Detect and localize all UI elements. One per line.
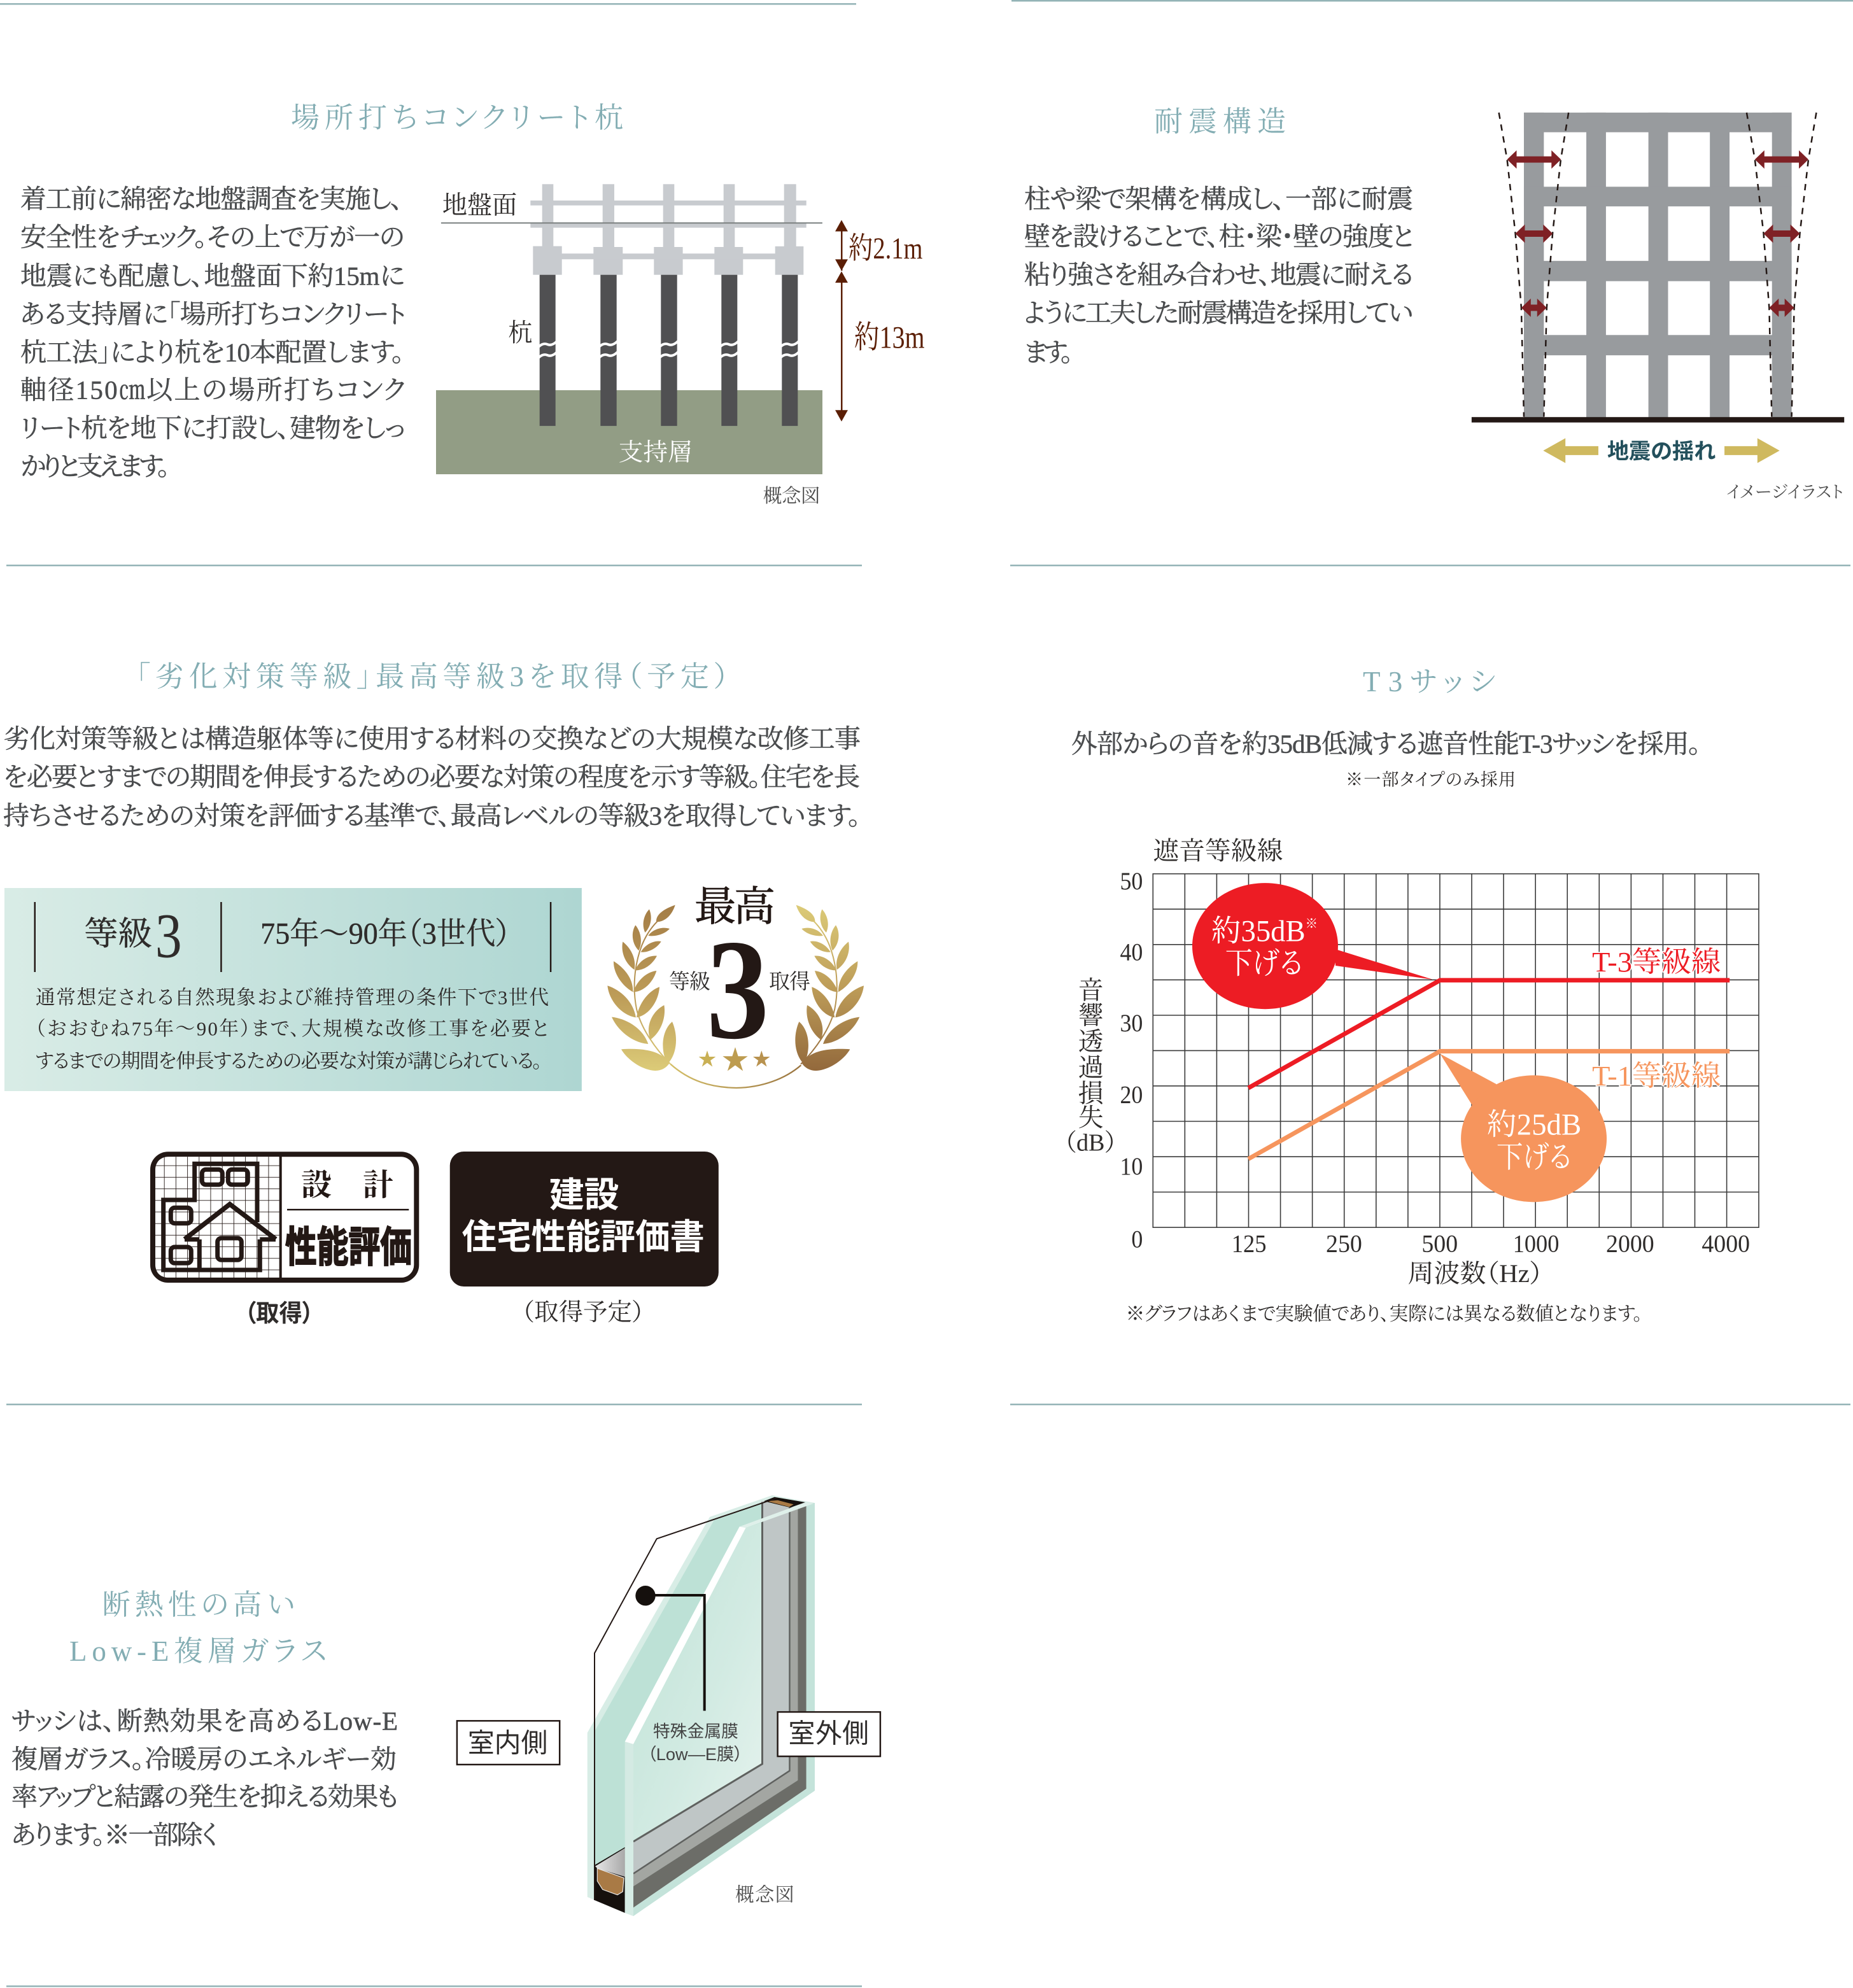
text block: grade description: 劣化対策等級とは構造躯体等に使用する材料の交換などの大規模な改修工事: [4, 724, 861, 754]
box separators: [35, 902, 551, 972]
dimension arrows and labels: [442, 192, 924, 507]
badge text: 等級: [669, 970, 710, 994]
heading: T3: T3サッシ: [1363, 666, 1495, 698]
heading: seismic: 耐震構造: [1154, 106, 1286, 137]
text block: piles description: ある支持層に「場所打ちコンクリート: [20, 299, 406, 328]
T-3 label: T-3等級線: [1592, 946, 1721, 978]
note: partial adoption: ※一部タイプのみ採用: [1346, 770, 1516, 789]
laurel arc: [670, 1064, 801, 1088]
panel: T3 sash: [1064, 666, 1759, 1325]
y axis numbers: 50: [1120, 868, 1143, 895]
text block: seismic description: ます。: [1024, 337, 1074, 367]
diagram: glass cross-section: [457, 1495, 880, 1916]
text block: Low-E description: 複層ガラス。冷暖房のエネルギー効: [11, 1744, 397, 1773]
frame edge lines: [633, 1502, 789, 1873]
text block: piles description: 安全性をチェック。その上で万が一の: [20, 223, 405, 252]
badge text: [669, 884, 810, 1069]
text block: seismic description: 壁を設けることで、柱・梁・壁の強度と: [1024, 222, 1414, 251]
diagram labels: 約2.1m: [849, 232, 922, 265]
stars: [699, 1047, 770, 1071]
text block: seismic description: 粘り強さを組み合わせ、地震に耐える: [1024, 260, 1413, 289]
pile break marks: [539, 341, 799, 358]
text block: Low-E description: [11, 1706, 398, 1850]
bearing layer: [436, 390, 822, 474]
logo grid: [155, 1157, 280, 1278]
logo: construction performance evaluation: [450, 1152, 719, 1287]
grade note: [36, 986, 549, 1073]
y axis numbers: 20: [1120, 1082, 1143, 1109]
callout: about 35dB: 下げる: [1225, 947, 1302, 981]
text block: Low-E description: 率アップと結露の発生を抑える効果も: [11, 1782, 398, 1812]
y axis numbers: [1120, 868, 1143, 1253]
x axis numbers: 1000: [1513, 1230, 1559, 1258]
left laurel: [607, 905, 676, 1071]
film label: 特殊金属膜: [653, 1722, 738, 1741]
ground level line: [441, 222, 822, 223]
caption: concept: 概念図: [735, 1885, 794, 1906]
grade label: 3: [155, 900, 182, 971]
panel: Low-E double glazing: [11, 1495, 880, 1916]
text block: Low-E description: サッシは、断熱効果を高めるLow-E: [11, 1706, 398, 1735]
chart: sound insulation grade lines: [1064, 837, 1759, 1325]
y axis numbers: 0: [1131, 1226, 1143, 1253]
text block: Low-E description: あります。※一部除く: [11, 1821, 220, 1850]
panel: seismic structure: [1024, 106, 1844, 502]
text block: grade description: 持ちさせるための対策を評価する基準で、最高レベルの等級3を取得しています。: [3, 801, 861, 830]
heading: Low-E: 断熱性の高い: [102, 1589, 295, 1621]
grade note: （おおむね75年〜90年）まで、大規模な改修工事を必要と: [36, 1017, 549, 1040]
logo divider: [279, 1155, 282, 1280]
glass outer body: [588, 1495, 815, 1916]
ground bar: [1472, 417, 1844, 423]
middle frame: [633, 1506, 798, 1886]
caption: acquired: （取得）: [244, 1301, 314, 1327]
callout: about 25dB: 下げる: [1497, 1141, 1571, 1174]
T-3 line: [1248, 980, 1730, 1088]
caption: image illustration: イメージイラスト: [1726, 483, 1843, 502]
y axis numbers: 10: [1120, 1153, 1143, 1180]
diagram: pile cross-section: [436, 184, 924, 507]
indoor pane: [595, 1504, 761, 1865]
badge text: 最高: [694, 884, 775, 930]
text block: piles description: 軸径150㎝以上の場所打ちコンク: [20, 376, 405, 405]
pale glass edge strip: [625, 1742, 633, 1916]
logo text: 性能評価: [285, 1223, 412, 1271]
outdoor pane: [633, 1523, 761, 1842]
x axis title: 周波数（Hz）: [1407, 1260, 1543, 1288]
text block: grade description: を必要とすまでの期間を伸長するための必要な対策の程度を示す等級。住宅を長: [3, 763, 860, 792]
y axis title: 音響透過損失: [1078, 976, 1104, 1132]
spacer: [633, 1501, 791, 1873]
top corner: [764, 1497, 805, 1507]
logo: construction performance evaluation: 建設: [549, 1175, 619, 1215]
frame: [1524, 113, 1792, 418]
x axis numbers: 2000: [1606, 1230, 1654, 1258]
label: outdoor side: [778, 1712, 880, 1756]
callout: about 35dB: [1192, 883, 1433, 1009]
diagram labels: 約13m: [854, 320, 924, 355]
white edge of film pane: [625, 1526, 746, 1744]
text block: T3 description: 外部からの音を約35dB低減する遮音性能T-3サッシを採用。: [1071, 730, 1702, 759]
sway dashed lines: [1499, 113, 1816, 417]
right laurel: [795, 905, 864, 1071]
chart grid: [1153, 874, 1759, 1227]
text block: seismic description: [1024, 185, 1414, 367]
label: quake shaking: 地震の揺れ: [1607, 439, 1716, 463]
diagram labels: 支持層: [619, 439, 693, 466]
label: outdoor side: 室外側: [789, 1719, 869, 1749]
text block: piles description: 杭工法」により杭を10本配置します。: [20, 337, 405, 367]
diagram labels: 杭: [508, 319, 532, 347]
quake direction arrows: [1543, 438, 1780, 463]
pale top band: [740, 1502, 814, 1528]
dark frame: [633, 1504, 807, 1908]
x axis numbers: [1232, 1230, 1750, 1258]
panel: deterioration countermeasure grade: [3, 661, 864, 1327]
diagram labels: [442, 192, 924, 507]
house plan: [164, 1164, 276, 1270]
label: indoor side: 室内側: [468, 1728, 547, 1758]
callout: about 25dB: [1440, 1054, 1607, 1202]
text block: piles description: 着工前に綿密な地盤調査を実施し、: [20, 185, 404, 214]
y axis numbers: 40: [1120, 939, 1143, 966]
text block: seismic description: ように工夫した耐震構造を採用してい: [1024, 298, 1413, 327]
T-1 line: [1248, 1051, 1730, 1159]
foundation frame: [530, 184, 807, 275]
leader to Low-E film: [635, 1586, 705, 1711]
icon: laurel badge: [607, 884, 864, 1088]
badge text: 3: [707, 910, 769, 1069]
diagram: building frame: [1472, 113, 1844, 502]
T-1 label: T-1等級線: [1592, 1060, 1721, 1092]
heading: Low-E: Low-E複層ガラス: [69, 1635, 327, 1667]
callout: about 25dB: 約25dB: [1487, 1108, 1581, 1141]
film label: （Low―E膜）: [647, 1745, 743, 1764]
heading: Low-E: [69, 1589, 327, 1667]
text block: piles description: 地震にも配慮し、地盤面下約15mに: [20, 261, 405, 290]
text block: piles description: かりと支えます。: [20, 452, 171, 481]
badge text: 取得: [769, 970, 810, 994]
diagram labels: 概念図: [763, 486, 820, 507]
callout: about 35dB: ※: [1306, 917, 1318, 931]
glass outline: [595, 1498, 777, 1900]
x axis numbers: 125: [1232, 1230, 1266, 1258]
film label: [647, 1722, 743, 1764]
logo frame: [153, 1154, 416, 1280]
text block: grade description: [3, 724, 861, 830]
x axis numbers: 250: [1326, 1230, 1362, 1258]
chart title: 遮音等級線: [1153, 837, 1283, 865]
logo text: 設計: [301, 1169, 393, 1202]
logo text: [285, 1169, 412, 1271]
dimension arrows: [835, 220, 848, 421]
logo: design performance evaluation: [153, 1154, 416, 1280]
panel: cast-in-place concrete piles: [20, 102, 924, 507]
label: indoor side: [457, 1721, 560, 1765]
heading: piles: 場所打ちコンクリート杭: [291, 102, 623, 134]
y axis title: [1064, 976, 1117, 1157]
grade label: 等級: [84, 916, 152, 953]
sway arrows: [1507, 150, 1808, 317]
grade label: [84, 900, 182, 971]
text block: piles description: リート杭を地下に打設し、建物をしっ: [20, 414, 405, 443]
x axis numbers: 500: [1421, 1230, 1458, 1258]
callout: about 35dB: 約35dB: [1211, 915, 1307, 948]
x axis numbers: 4000: [1702, 1230, 1750, 1258]
caption: planned: （取得予定）: [522, 1299, 644, 1326]
piles: [540, 275, 798, 426]
logo: construction performance evaluation: 住宅性能評価書: [462, 1217, 705, 1257]
y axis numbers: 30: [1120, 1010, 1143, 1037]
diagram labels: 地盤面: [442, 192, 517, 220]
text block: piles description: [20, 185, 406, 481]
y axis title: （dB）: [1064, 1130, 1117, 1157]
grade note: 通常想定される自然現象および維持管理の条件下で3世代: [36, 986, 549, 1009]
text block: seismic description: 柱や梁で架構を構成し、一部に耐震: [1024, 185, 1413, 214]
grade note: するまでの期間を伸長するための必要な対策が講じられている。: [36, 1050, 542, 1073]
period label: 75年〜90年（3世代）: [260, 917, 510, 951]
end cap: [595, 1847, 625, 1913]
chart footnote: ※グラフはあくまで実験値であり、実際には異なる数値となります。: [1125, 1304, 1643, 1325]
grade box: [4, 888, 582, 1091]
heading: grade: 「劣化対策等級」最高等級3を取得（予定）: [136, 661, 728, 693]
diagram labels: [457, 1712, 880, 1906]
outer glass edge: [633, 1503, 815, 1916]
